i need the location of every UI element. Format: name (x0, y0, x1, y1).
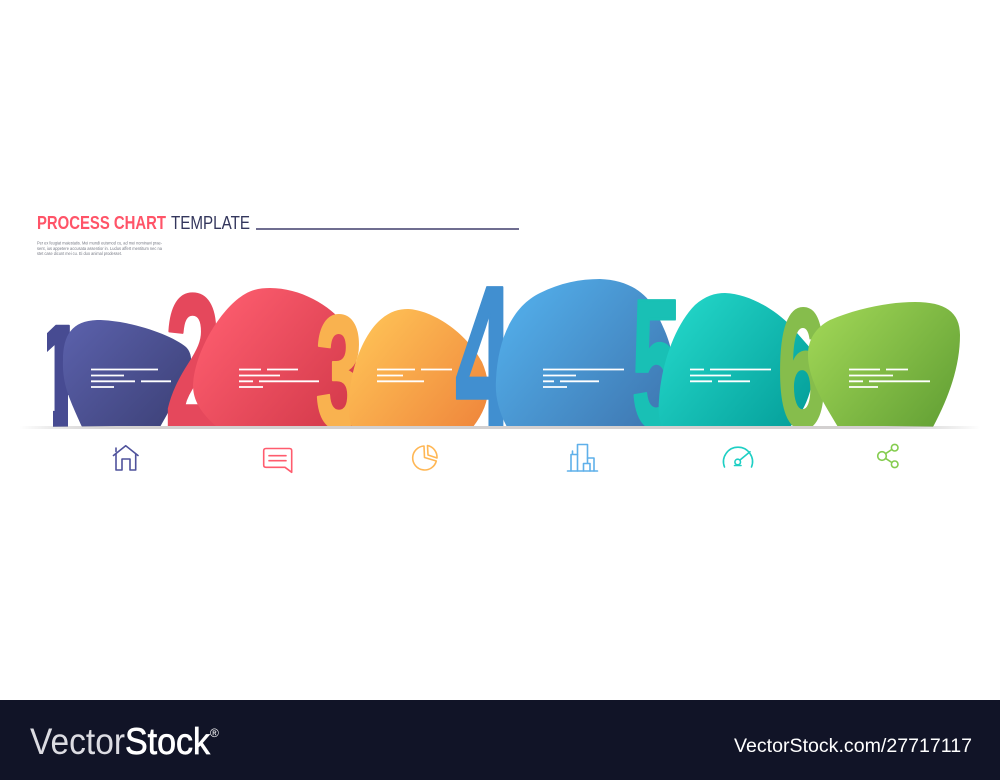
footer logo (30, 721, 219, 762)
footer logo: Vector (30, 721, 125, 762)
text lines 6 (849, 370, 930, 387)
text lines 1 (91, 370, 171, 387)
blob 5 (659, 293, 813, 427)
blob 2 (193, 288, 358, 427)
blob 3 (349, 309, 488, 427)
text lines 4 (543, 370, 624, 387)
intro text: sent, ius appetere accusata assentior in. Ludus affert mentitum nec na (37, 246, 162, 252)
intro text: Per ex feugiat maiestatis. Mei mundi euismod cu, ad mei nominavi prae- (37, 240, 162, 246)
title: PROCESS CHART (37, 213, 166, 233)
title rule (256, 228, 519, 230)
icon: speedometer (724, 447, 752, 467)
step 4 (455, 244, 672, 471)
icon: pie chart (413, 446, 437, 470)
icon: city buildings (568, 444, 598, 471)
text lines 2 (239, 370, 319, 387)
text lines 3 (377, 370, 452, 381)
footer band (0, 700, 1000, 780)
icon: house (114, 446, 138, 470)
number 4: 4 (455, 244, 513, 471)
text lines 5 (690, 370, 771, 381)
step 5 (631, 261, 813, 466)
number 2: 2 (165, 255, 221, 468)
icon: share (878, 444, 898, 468)
number 1: 1 (32, 294, 88, 459)
blob 4 (496, 279, 672, 427)
blob 1 (63, 320, 191, 427)
title: TEMPLATE (171, 213, 250, 233)
footer logo: ® (210, 726, 219, 740)
intro text (37, 240, 162, 257)
blob 6 (808, 302, 960, 427)
step 3 (316, 283, 488, 462)
number 6: 6 (778, 274, 826, 463)
footer logo: Stock (125, 721, 210, 762)
step 6 (778, 274, 960, 463)
icon: speech bubble (264, 448, 292, 472)
number 3: 3 (316, 283, 363, 462)
number 5: 5 (631, 261, 681, 466)
footer url: VectorStock.com/27717117 (734, 736, 972, 757)
intro text: stet case dicunt mei cu. Ei duo animal prodesset. (37, 251, 122, 257)
step 2 (165, 255, 358, 468)
ground shadow (20, 426, 980, 429)
step 1 (25, 294, 191, 459)
